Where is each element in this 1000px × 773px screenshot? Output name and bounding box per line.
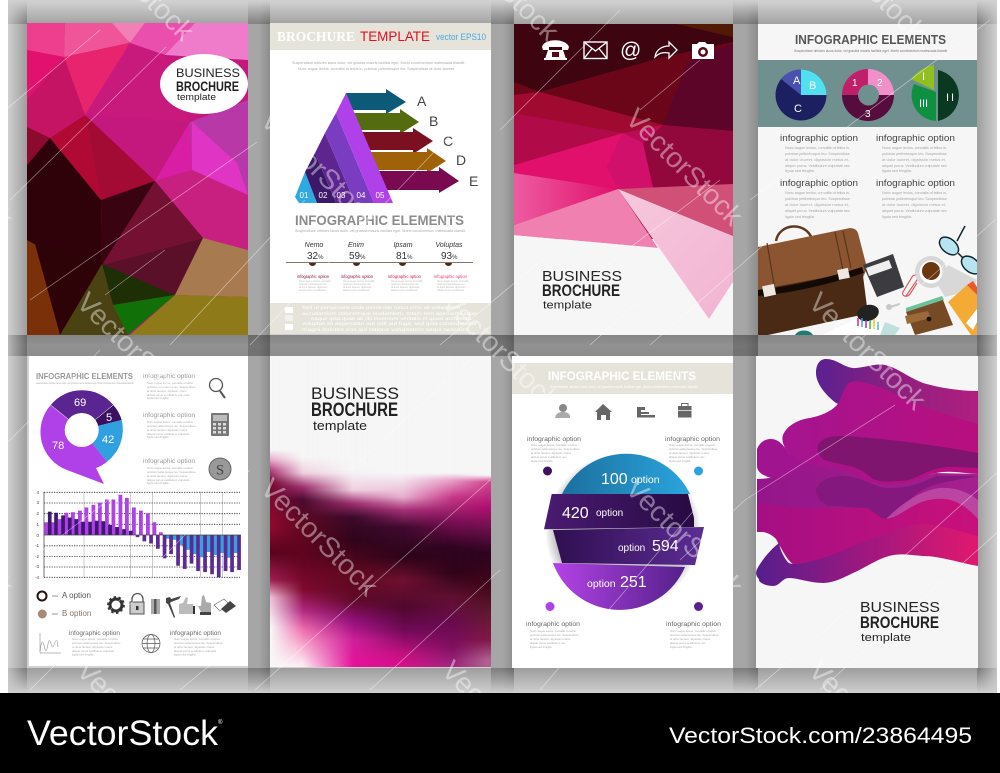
icon: house [595,404,612,420]
option notes with icons: pulvinar pellentesque leo. Suspendisse [147,385,196,389]
donut chart with callout tail [40,390,123,484]
icon: dollar coin: S [216,462,224,478]
segment 420: 420 [562,505,589,522]
footer band: voluptas sit aspernatur aut odit aut fugit, sed quia consequuntur [302,321,478,327]
icon: flag [166,596,181,618]
option columns: aliquet purus vestibulum [343,289,370,292]
option text blocks: pulvinar pellentesque leo. Suspendisse [785,151,851,156]
donut chart: 1 2 3: 3 [865,109,871,120]
intro text [292,60,465,71]
header band: BROCHURE [277,30,355,45]
percentage stats [286,242,473,266]
cover title [311,384,399,433]
header band [270,23,491,50]
icon: telephone [542,40,569,60]
header band: INFOGRAPHIC ELEMENTS [548,369,696,383]
icons row [555,404,692,420]
arrows A-E: E [469,173,478,189]
header band [512,363,733,394]
icon: gear [108,597,124,613]
bar chart: -2 [35,554,39,559]
corner options: at dolor laoreet, dignissim metus [530,637,571,641]
pie chart: roman numerals: II [946,92,954,104]
option notes with icons: aliquet purus vestibulum vulputate [147,432,190,436]
corner options: ligula sed fringilla. [531,459,553,463]
icon: case [678,404,692,418]
corner options: at dolor laoreet, dignissim metus [670,637,711,641]
option text blocks: ligula sed fringilla. [882,214,912,219]
bar chart: -3 [35,564,39,569]
heading: infographic elements: INFOGRAPHIC ELEMENTS [295,212,464,228]
header band: vector EPS10 [436,32,486,42]
segment 100 [562,454,690,494]
ribbon circle [544,453,704,610]
legend: A option [62,591,91,600]
icon row [108,594,236,618]
option notes with icons: infographic option [143,373,195,380]
icon: pointing hand [198,595,211,615]
option columns: pulvinar pellentesque leo [391,283,419,286]
bottom options: infographic option [69,630,120,637]
watermark: VectorStock text: VectorStock [620,472,750,602]
option columns: aliquet purus vestibulum [299,289,326,292]
option columns: at dolor laoreet, dignissim [299,286,328,289]
option columns: Nunc augue lectus, convallis [391,280,423,283]
option columns: infographic option [388,274,422,279]
bottom options: at dolor laoreet, dignissim metus [72,645,113,649]
option text blocks: aliquet purus. Vestibulum vulputate nec [785,208,850,213]
footer band: eaque ipsa quae ab illo inventore veritatis et quasi architecto [311,316,471,322]
icon: padlock [130,594,144,614]
legend: B option [62,609,91,618]
cover title: template [543,300,592,312]
bar chart: 4 [36,490,39,495]
cover title: template [861,632,911,644]
cover title [860,600,940,644]
corner options: aliquet purus vestibulum nec [530,641,566,645]
icon: glasses [938,226,977,275]
corner options: infographic option [665,436,720,443]
teal band with pies [758,60,977,127]
corner options: pulvinar pellentesque leo. Suspendisse [669,447,718,451]
option columns: infographic option [434,274,468,279]
corner options: pulvinar pellentesque leo. Suspendisse [670,633,719,637]
icon: wallet [905,296,953,335]
cover label ellipse: BROCHURE [176,78,239,94]
cover title: BUSINESS [860,600,940,616]
icon: folder [948,281,977,335]
pie chart: A B C: B [809,80,816,92]
option text blocks: at dolor laoreet, dignissim metus et, [882,157,946,162]
pie chart: A B C: C [794,103,802,115]
option text blocks: Nunc augue lectus, convallis ut tellus in, [882,145,947,150]
option notes with icons: Nunc augue lectus, convallis ut tellus [147,466,193,470]
donut chart: 1 2 3 [842,69,894,121]
segment 594 [553,527,704,565]
footer band: magni dolores eos qui ratione voluptatem sequi nesciunt. [302,327,470,333]
footer: black brand bar: ® [218,719,223,726]
cover title: BROCHURE [542,281,620,300]
corner options: ligula sed fringilla. [669,459,691,463]
heading: INFOGRAPHIC ELEMENTS [36,371,133,381]
icon: paper clip [903,275,918,296]
option notes with icons [143,373,231,485]
option columns: at dolor laoreet, dignissim [391,286,420,289]
option text blocks: Nunc augue lectus, convallis ut tellus in, [785,145,850,150]
icon: book [151,599,160,614]
corner options: aliquet purus vestibulum nec [670,641,706,645]
segment 594: 594 [652,538,679,555]
bar chart: -4 [35,575,39,580]
legend [38,591,91,618]
icon: people [555,404,570,418]
corner options: aliquet purus vestibulum nec [531,455,567,459]
corner options: at dolor laoreet, dignissim metus [531,451,572,455]
segment 251: 251 [620,574,647,591]
footer band [270,303,491,334]
cover title [542,268,622,312]
segment 100: option [631,474,660,486]
bar chart: 2 [36,511,39,516]
pie chart: A B C [776,69,826,120]
corner options: ligula sed fringilla. [530,645,552,649]
option columns: aliquet purus vestibulum [437,289,464,292]
corner options: Nunc augue lectus, convallis ut tellus [531,443,577,447]
corner options: Nunc augue lectus, convallis ut tellus [669,443,715,447]
option notes with icons: infographic option [143,458,195,465]
intro text: Nunc augue lectus, convallis ut tellus in, pulvinar pellentesque leo. Suspendisse at dolor laoreet. [298,66,455,71]
option columns: pulvinar pellentesque leo [299,283,327,286]
option columns [297,274,469,292]
icon: camera [692,42,714,59]
watermark: VectorStock text: VectorStock [255,104,385,234]
percentage stats: 81% [396,251,413,262]
donut chart with callout tail: 5 [106,412,112,424]
bottom options: pulvinar pellentesque leo. Suspendisse [174,641,223,645]
pie chart: roman numerals [911,65,959,121]
option notes with icons: ligula sed fringilla. [147,481,169,485]
option columns: Nunc augue lectus, convallis [343,280,375,283]
bar chart: -1 [35,543,39,548]
corner options: Nunc augue lectus, convallis ut tellus [530,629,576,633]
footer: black brand bar [0,693,1000,773]
option columns: infographic option [341,274,374,279]
pyramid: 04 [357,191,366,200]
option text blocks: at dolor laoreet, dignissim metus et, [882,202,946,207]
option notes with icons: at dolor laoreet, dignissim metus [147,428,188,432]
pyramid: 05 [376,191,385,200]
option text blocks: infographic option [780,178,858,189]
subheading: Suspendisse ultricies lacus dolor, vel gravida mauris facilisis eget. Morbi condimentum malesuada blandit. [36,381,134,385]
option text blocks: Nunc augue lectus, convallis ut tellus in, [882,190,947,195]
arrows A-E [346,89,478,193]
arrows A-E: A [417,93,427,109]
bottom options: ligula sed fringilla. [174,652,196,656]
panel: circular ribbon infographic [512,356,733,668]
option notes with icons: pulvinar pellentesque leo. Suspendisse [147,470,196,474]
subheading: Suspendisse ultricies lacus dolor, vel gravida mauris facilisis eget. Morbi condimentum malesuada blandit. [295,228,466,233]
option text blocks: infographic option [876,133,955,144]
percentage stats: Voluptas [436,242,463,249]
panel: pie, bars and icons [29,356,248,666]
corner options: Nunc augue lectus, convallis ut tellus [670,629,716,633]
icon: coffee cup [915,256,947,288]
option columns: pulvinar pellentesque leo [343,283,371,286]
bar chart: 3 [36,500,39,505]
watermark: VectorStock text: VectorStock [255,472,385,602]
bar chart: 0 [36,533,39,538]
icon: calculator grey [211,413,229,436]
donut chart: 1 2 3: 2 [877,78,883,89]
watermark: VectorStock text: VectorStock [803,286,933,416]
footer band: accusantium doloremque laudantium, totam rem aperiam eaque [302,311,477,317]
icon: globe [142,634,160,652]
segment 251 [553,563,685,610]
corner options: ligula sed fringilla. [670,645,692,649]
corner options: pulvinar pellentesque leo. Suspendisse [530,633,579,637]
panel: pink polygon cover [27,23,248,335]
cover label ellipse: BUSINESS [176,66,240,80]
option columns: at dolor laoreet, dignissim [437,286,466,289]
option text blocks: ligula sed fringilla. [882,168,912,173]
bottom options: at dolor laoreet, dignissim metus [174,645,215,649]
percentage stats: 93% [441,251,458,262]
option text blocks: at dolor laoreet, dignissim metus et, [785,157,849,162]
cover title: template [313,419,367,433]
segment 420: option [596,508,623,519]
watermark: VectorStock text: VectorStock [71,286,201,416]
panel: fluid purple cover [756,356,978,668]
bottom options: aliquet purus vestibulum vulputate [174,649,217,653]
icon: keys and charts [795,302,900,335]
option notes with icons: ligula sed fringilla. [147,435,169,439]
option text blocks: at dolor laoreet, dignissim metus et, [785,202,849,207]
icon: line chart [40,633,61,653]
option columns: aliquet purus vestibulum [391,289,418,292]
icon: newspaper [938,265,977,297]
option notes with icons: Nunc augue lectus, convallis ut tellus [147,381,193,385]
pyramid [295,93,393,203]
option text blocks: aliquet purus. Vestibulum vulputate nec [785,163,850,168]
pyramid: 02 [319,191,328,200]
cover label ellipse: template [177,92,216,102]
icon: bars [637,407,655,418]
watermark: VectorStock text: VectorStock [436,286,566,416]
option notes with icons: pulvinar pellentesque leo. Suspendisse [147,424,196,428]
heading: INFOGRAPHIC ELEMENTS [795,33,946,47]
corner options: aliquet purus vestibulum nec [669,455,705,459]
pyramid: 01 [300,191,309,200]
corner options [526,436,721,649]
arrows A-E: D [456,152,466,168]
option notes with icons: infographic option [143,412,195,419]
watermark: VectorStock text: VectorStock [620,102,750,232]
option text blocks [780,133,955,219]
percentage stats: Enim [348,242,364,249]
segment 594: option [618,543,645,554]
cover title: BROCHURE [311,400,398,421]
footer: black brand bar: VectorStock [27,714,219,753]
icon: envelope [584,42,607,58]
icon: magnifier [210,378,225,398]
corner options: infographic option [527,436,581,443]
pie chart: roman numerals: I [922,71,925,83]
bottom options [40,630,223,656]
option notes with icons: ligula sed fringilla. [147,396,169,400]
option columns: pulvinar pellentesque leo [437,283,465,286]
option text blocks: Nunc augue lectus, convallis ut tellus in, [785,190,850,195]
cover title: BUSINESS [542,268,622,285]
option text blocks: pulvinar pellentesque leo. Suspendisse [882,151,948,156]
footer band: Sed ut perspiciatis unde omnis iste natus error sit voluptatem [302,305,460,311]
option notes with icons: aliquet purus vestibulum vulputate [147,393,190,397]
donut chart with callout tail: 69 [74,397,86,409]
panel: infographic charts and briefcase [758,24,984,335]
corner options: pulvinar pellentesque leo. Suspendisse [531,447,580,451]
corner options: at dolor laoreet, dignissim metus [669,451,710,455]
option notes with icons: Nunc augue lectus, convallis ut tellus [147,420,193,424]
bottom options: Nunc augue lectus, convallis ut tellus [174,637,220,641]
bottom options: Nunc augue lectus, convallis ut tellus [72,637,118,641]
option columns: Nunc augue lectus, convallis [299,280,331,283]
corner options: infographic option [526,621,580,628]
corner options: infographic option [666,621,721,628]
bottom options: infographic option [170,630,221,637]
arrows A-E: C [443,133,453,149]
icon: calculator [863,254,904,297]
bar chart [35,490,241,580]
option columns: at dolor laoreet, dignissim [343,286,372,289]
percentage stats: 32% [307,251,324,262]
cover label ellipse [160,54,248,114]
option text blocks: pulvinar pellentesque leo. Suspendisse [785,196,851,201]
option text blocks: aliquet purus. Vestibulum vulputate nec [882,163,947,168]
segment 420 [544,494,694,529]
bar chart: 1 [36,522,39,527]
arrows A-E: B [429,113,438,129]
contact icons [542,39,714,62]
bottom options: ligula sed fringilla. [72,652,94,656]
panel: crimson polygon cover [514,24,733,335]
option text blocks: ligula sed fringilla. [785,214,815,219]
pie chart: roman numerals: III [919,98,928,110]
donut chart: 1 2 3: 1 [852,78,858,89]
icon: briefcase [758,226,875,335]
option notes with icons: at dolor laoreet, dignissim metus [147,389,188,393]
cover title: BROCHURE [860,613,939,632]
pie chart: A B C: A [793,75,801,87]
percentage stats: Nemo [305,242,323,249]
subheading: Suspendisse ultricies lacus dolor, vel gravida mauris facilisis eget. Morbi condimentum malesuada blandit. [794,48,948,53]
intro text: Suspendisse ultricies lacus dolor, vel gravida mauris facilisis eget. Morbi condimentum malesuada blandit. [292,60,465,65]
header band: Suspendisse ultricies lacus dolor, vel gravida mauris facilisis eget. Morbi condimentum malesuada blandit. [550,385,698,389]
segment 251: option [587,578,616,590]
bottom options: aliquet purus vestibulum vulputate [72,649,115,653]
panel: pyramid brochure [270,23,491,334]
icon: share arrow [655,42,677,58]
panel: blurred wave cover [270,356,491,667]
icon: at sign: @ [620,39,641,62]
percentage stats: 59% [349,251,366,262]
option columns: Nunc augue lectus, convallis [437,280,469,283]
segment 100: 100 [601,471,628,488]
pyramid: 03 [337,191,346,200]
bottom options: pulvinar pellentesque leo. Suspendisse [72,641,121,645]
footer: black brand bar: VectorStock.com/23864495 [669,723,972,748]
donut chart with callout tail: 42 [102,434,114,446]
donut chart with callout tail: 78 [52,440,64,452]
percentage stats: Ipsam [393,242,413,249]
option notes with icons: at dolor laoreet, dignissim metus [147,474,188,478]
icon: handshake [214,599,236,613]
option text blocks: aliquet purus. Vestibulum vulputate nec [882,208,947,213]
option text blocks: infographic option [780,133,858,144]
option text blocks: pulvinar pellentesque leo. Suspendisse [882,196,948,201]
cover title: BUSINESS [311,384,399,403]
header band: TEMPLATE [360,28,430,44]
option text blocks: infographic option [876,178,955,189]
option text blocks: ligula sed fringilla. [785,168,815,173]
option columns: infographic option [297,274,330,279]
icon: thumb up [179,597,195,614]
option notes with icons: aliquet purus vestibulum vulputate [147,478,190,482]
